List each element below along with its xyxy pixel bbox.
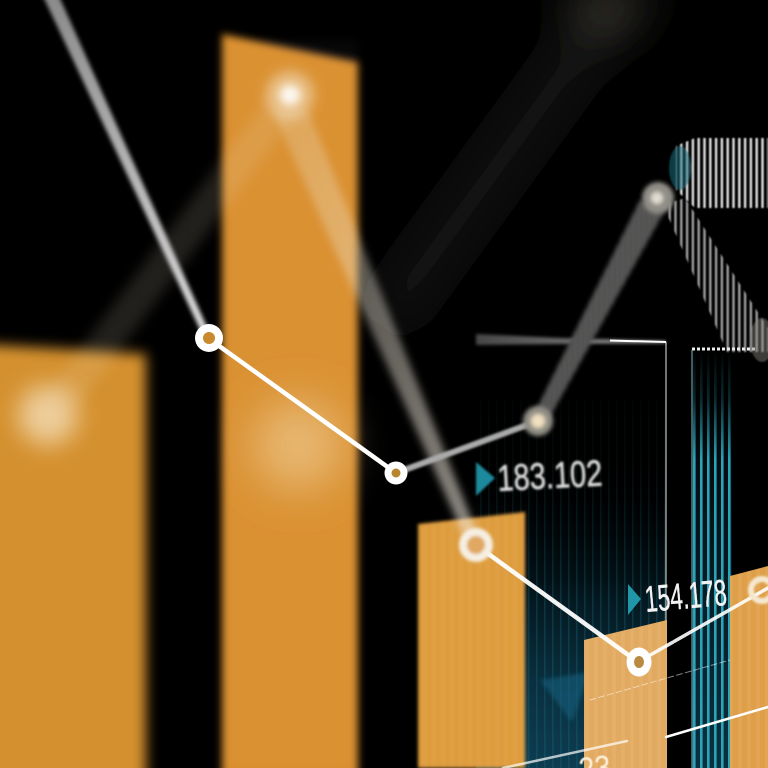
blurred line segments [42,0,538,545]
node: on bar 3 [463,532,489,558]
panel: right data frame with bright teal stripes [692,349,756,768]
bar 1 [0,344,146,768]
node: top centre [280,85,300,105]
node: centre [384,462,408,484]
bar 5 [730,566,768,768]
node: blurred [523,406,553,436]
bar highlights [18,71,343,490]
node: right edge [751,579,768,601]
value: 154.178 [628,572,728,620]
sharp white line segments [208,338,768,768]
teal triangle behind bars [540,672,590,722]
bar 4 [584,620,667,768]
bar 3 [418,512,525,768]
striped blurred line at top right [663,138,768,362]
value: 183.102 [476,453,603,499]
bar 2 [222,34,358,768]
blurred rising line to peak [532,200,664,424]
panel: left data frame with teal stripes [476,334,666,768]
node: left [195,324,223,352]
node: peak [642,182,674,214]
value: 183.102: 183.102 [496,453,603,499]
node: bright low [626,648,652,676]
faint background diagonal line [385,0,660,320]
